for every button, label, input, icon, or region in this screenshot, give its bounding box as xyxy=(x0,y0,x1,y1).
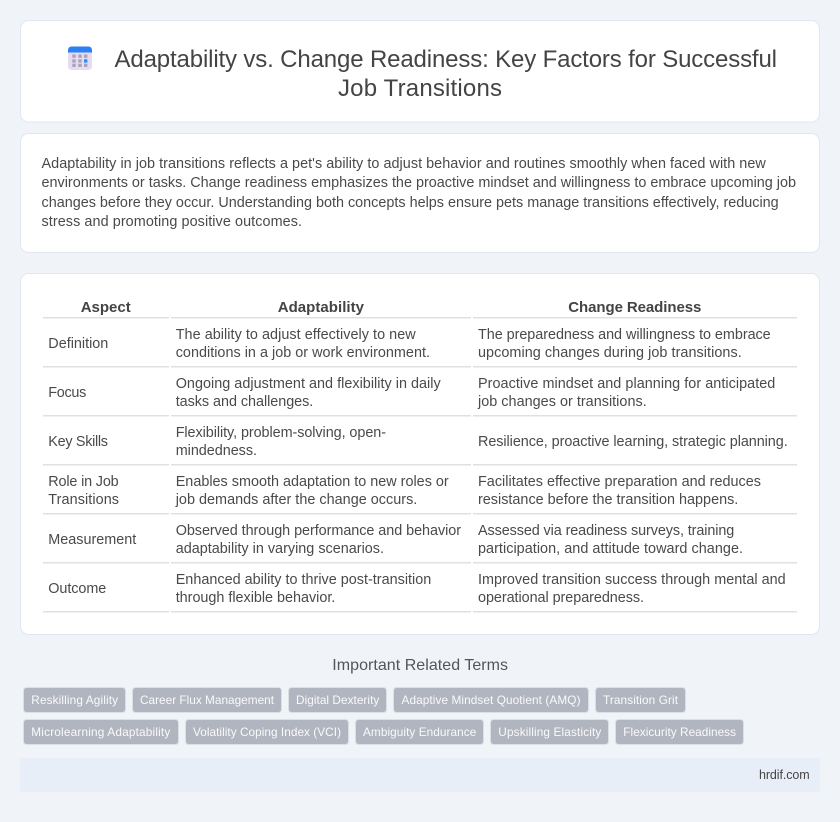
chip: reskilling agility xyxy=(24,688,126,712)
table row: outcome: Outcome xyxy=(48,581,106,597)
table header row: Change Readiness xyxy=(568,299,701,316)
table row: definition: conditions in a job or work environment. xyxy=(176,345,430,361)
table row: role in job transitions: resistance before the transition happens. xyxy=(478,492,738,508)
chip: digital dexterity: Digital Dexterity xyxy=(296,693,379,707)
text block: introduction: stress and promoting positive outcomes. xyxy=(42,214,302,230)
footer text: source: hrdif.com xyxy=(759,768,810,782)
text block: introduction: changes before they occur. Understanding both concepts helps ensure pets manage transitions effectively, reducing xyxy=(42,195,779,211)
table row: definition: The preparedness and willingness to embrace xyxy=(478,327,771,343)
table row: key skills: mindedness. xyxy=(176,443,257,459)
title: Adaptability vs. Change Readiness: Key Factors for Successful xyxy=(114,46,777,73)
table row: measurement: Assessed via readiness surveys, training xyxy=(478,523,734,539)
chip: digital dexterity xyxy=(288,688,386,712)
chip: reskilling agility: Reskilling Agility xyxy=(31,693,118,707)
chip: microlearning adaptability: Microlearning Adaptability xyxy=(31,725,170,739)
chip: career flux management xyxy=(132,688,282,712)
text block: introduction: environments or tasks. Change readiness emphasizes the proactive mindset and willingness to embrace upcoming job xyxy=(42,175,796,191)
table row: measurement: Measurement xyxy=(48,532,136,548)
chip: volatility coping index: Volatility Coping Index (VCI) xyxy=(193,725,341,739)
table row: definition: Definition xyxy=(48,336,108,352)
table header row: Aspect xyxy=(81,299,131,316)
table row: role in job transitions: Role in Job xyxy=(48,474,119,490)
table row: focus: Ongoing adjustment and flexibility in daily xyxy=(176,376,441,392)
chip: career flux management: Career Flux Management xyxy=(140,693,275,707)
chip: adaptive mindset quotient: Adaptive Mindset Quotient (AMQ) xyxy=(402,693,581,707)
chip: flexicurity readiness xyxy=(616,720,744,744)
table row: focus: tasks and challenges. xyxy=(176,394,313,410)
table row: definition: upcoming changes during job transitions. xyxy=(478,345,742,361)
table row: measurement: participation, and attitude toward change. xyxy=(478,541,743,557)
heading: important related terms: Important Related Terms xyxy=(332,657,508,674)
title xyxy=(114,46,777,102)
table row: focus: Proactive mindset and planning for anticipated xyxy=(478,376,775,392)
table row: role in job transitions: Transitions xyxy=(48,492,119,508)
text block: introduction xyxy=(42,156,796,230)
chip: volatility coping index xyxy=(186,720,348,744)
panel: comparison table xyxy=(20,274,820,634)
table row: measurement xyxy=(48,523,743,557)
table row: role in job transitions: Enables smooth adaptation to new roles or xyxy=(176,474,449,490)
table header row: Adaptability xyxy=(278,299,365,316)
table row: role in job transitions: job demands after the change occurs. xyxy=(175,492,417,508)
chip: adaptive mindset quotient xyxy=(394,688,588,712)
chip: upskilling elasticity xyxy=(490,720,608,744)
footer xyxy=(20,758,820,792)
table row: outcome: through flexible behavior. xyxy=(176,590,335,606)
chip: upskilling elasticity: Upskilling Elasticity xyxy=(498,725,601,739)
table row: key skills xyxy=(48,425,788,459)
table row: definition: The ability to adjust effectively to new xyxy=(176,327,416,343)
table row: outcome: Improved transition success through mental and xyxy=(478,572,786,588)
table row: measurement: adaptability in varying scenarios. xyxy=(176,541,384,557)
related term chips xyxy=(24,688,744,744)
table row: definition xyxy=(48,327,771,361)
chip: ambiguity endurance xyxy=(356,720,484,744)
table row: key skills: Key Skills xyxy=(48,434,108,450)
panel: header xyxy=(20,20,820,122)
title: Job Transitions xyxy=(338,75,502,102)
chip: microlearning adaptability xyxy=(24,720,178,744)
chip: transition grit: Transition Grit xyxy=(603,693,679,707)
table row: focus: Focus xyxy=(48,385,86,401)
chip: ambiguity endurance: Ambiguity Endurance xyxy=(363,725,477,739)
icon: calendar xyxy=(68,46,92,70)
table row: role in job transitions: Facilitates effective preparation and reduces xyxy=(478,474,761,490)
table row: focus: job changes or transitions. xyxy=(477,394,647,410)
table row: outcome xyxy=(48,572,786,606)
text block: introduction: Adaptability in job transitions reflects a pet's ability to adjust behavior and routines smoothly when faced with new xyxy=(42,156,766,172)
table header row xyxy=(81,299,701,316)
table row: key skills: Flexibility, problem-solving, open- xyxy=(176,425,386,441)
table row: focus xyxy=(48,376,775,410)
table row: role in job transitions xyxy=(48,474,761,508)
table row: measurement: Observed through performance and behavior xyxy=(176,523,461,539)
chip: transition grit xyxy=(596,688,686,712)
chip: flexicurity readiness: Flexicurity Readiness xyxy=(623,725,736,739)
table row: outcome: operational preparedness. xyxy=(478,590,644,606)
table row: outcome: Enhanced ability to thrive post-transition xyxy=(176,572,431,588)
panel: introduction xyxy=(20,134,820,252)
table row: key skills: Resilience, proactive learning, strategic planning. xyxy=(478,434,788,450)
